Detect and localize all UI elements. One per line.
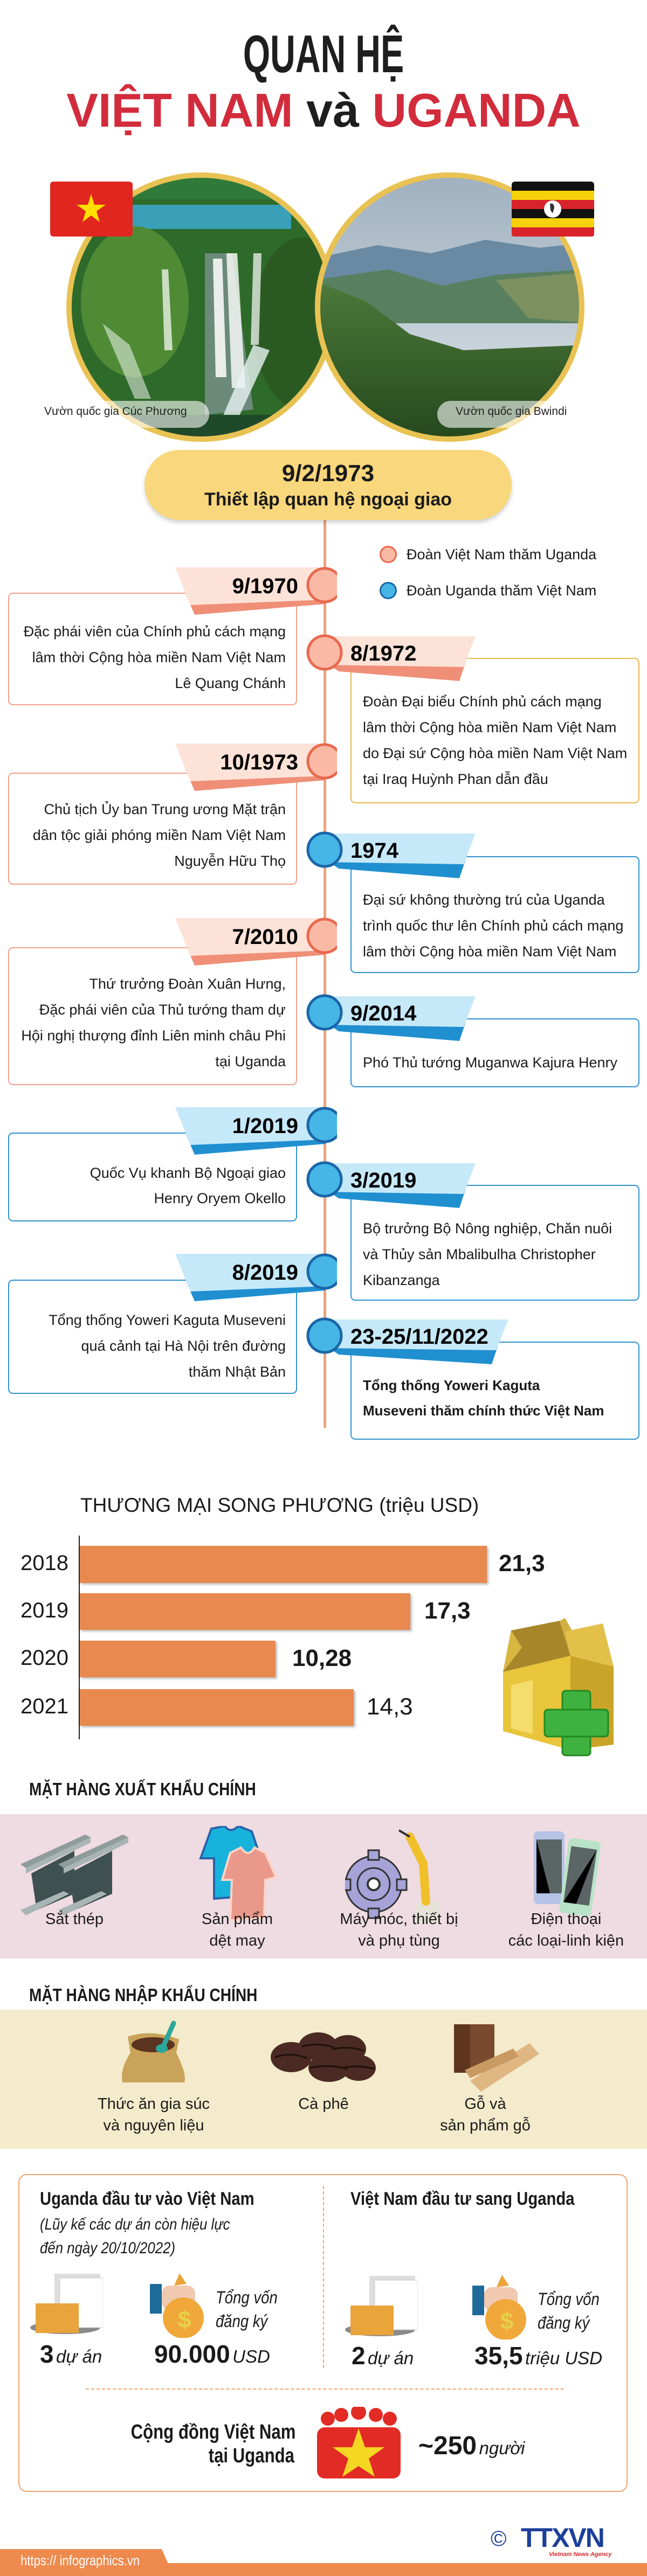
entry: 7/2010 [8,918,337,1085]
title line 1: QUAN HỆ [243,24,404,84]
icon: money bag: $ [500,2308,513,2335]
entry: 8/1972: Đoàn Đại biểu Chính phủ cách mạng [363,693,602,710]
block: Uganda invests in Vietnam: (Lũy kế các dự án còn hiệu lực [40,2216,230,2233]
icon: people with flag star [317,2407,401,2478]
establishment pill [144,450,512,520]
label: phones [508,1911,624,1949]
icon: shirts [199,1826,276,1921]
entry: 7/2010: 7/2010 [232,925,298,949]
legend [380,546,596,599]
footer bar [0,2549,647,2576]
panel: exports [0,1814,647,1959]
entry: 23-25/11/2022: 23-25/11/2022 [350,1325,488,1349]
block: Uganda invests in Vietnam [30,2189,278,2368]
entry: 23-25/11/2022: Tổng thống Yoweri Kaguta [363,1377,540,1393]
block: Vietnam invests in Uganda: Tổng vốn [538,2289,600,2309]
entry: 9/2014: Phó Thủ tướng Muganwa Kajura Henry [363,1054,617,1071]
logo: TTXVN: © [491,2527,506,2551]
legend: Đoàn Việt Nam thăm Uganda [407,546,596,563]
label: phones: Điện thoại [531,1911,601,1928]
entry: 10/1973: Nguyễn Hữu Thọ [174,853,286,869]
block: Vietnamese community: tại Uganda [209,2445,294,2467]
entry: 9/1970: Đặc phái viên của Chính phủ cách mạng [24,623,286,640]
entry: 3/2019: Bộ trưởng Bộ Nông nghiệp, Chăn nuôi [363,1220,612,1237]
block: Uganda invests in Vietnam: 3 dự án [40,2340,102,2368]
trade title: THƯƠNG MẠI SONG PHƯƠNG (triệu USD) [80,1494,479,1516]
entry: 3/2019 [306,1162,639,1301]
entry: 8/2019 [8,1253,337,1394]
block: Vietnam invests in Uganda: 35,5 triệu USD [474,2342,602,2370]
label: animal feed [98,2095,210,2134]
entry: 8/2019: thăm Nhật Bản [189,1364,286,1380]
label: wood [440,2095,531,2134]
label: machinery: Máy móc, thiết bị [340,1911,458,1928]
entry: 23-25/11/2022: Museveni thăm chính thức Việt Nam [363,1402,604,1419]
entry: 1974: Đại sứ không thường trú của Uganda [363,892,605,908]
entry: 9/1970: Lê Quang Chánh [175,675,286,691]
panel: imports [0,2010,647,2149]
entry: 7/2010: tại Uganda [215,1053,286,1070]
entry: 9/1970: 9/1970 [232,574,298,598]
caption pills [43,401,209,428]
block: Vietnamese community [131,2407,525,2478]
logo: TTXVN: TTXVN [521,2523,604,2553]
entry: 8/1972 [306,635,639,803]
icon: money bag [150,2273,204,2338]
establishment pill: 9/2/1973 [282,460,374,487]
flag: Uganda [512,182,594,237]
entry: 9/2014: 9/2014 [350,1002,417,1025]
bar 2020: 2020 [20,1646,68,1670]
block: Uganda invests in Vietnam: 90.000 USD [154,2340,270,2368]
label: machinery [340,1911,458,1949]
icon: steel beams [20,1835,128,1915]
entry: 9/2014 [306,995,639,1087]
label: animal feed: Thức ăn gia súc [98,2095,210,2113]
entry: 7/2010: Đặc phái viên của Thủ tướng tham dự [39,1002,286,1018]
bar 2018: 2018 [20,1551,68,1575]
block: Vietnam invests in Uganda: Việt Nam đầu tư sang Uganda [350,2189,574,2209]
label: textiles: Sản phẩm [202,1911,273,1928]
entry: 8/1972: lâm thời Cộng hòa miền Nam Việt Nam [363,719,616,735]
entry: 3/2019: 3/2019 [350,1169,416,1192]
legend: Uganda visits [380,582,397,599]
timeline line [324,517,326,1428]
icon: money bag: $ [178,2307,191,2333]
entry: 1974: trình quốc thư lên Chính phủ cách mạng [363,918,623,934]
title [66,24,581,137]
label: coffee: Cà phê [298,2095,349,2113]
title line 2: VIỆT NAM và UGANDA [66,84,581,137]
block: Vietnam invests in Uganda [345,2189,602,2370]
bar 2019 [20,1593,471,1633]
bar 2021 [20,1689,413,1728]
entry: 10/1973: dân tộc giải phóng miền Nam Việt Nam [33,827,286,843]
panel: investment and community [18,2174,628,2492]
photo: Cuc Phuong waterfall [72,178,322,436]
icon: documents [345,2276,418,2336]
heading: main exports: MẶT HÀNG XUẤT KHẨU CHÍNH [29,1779,256,1799]
bar 2020 [20,1641,352,1680]
entry: 8/2019: quá cảnh tại Hà Nội trên đường [81,1338,286,1354]
icon: box with plus [503,1618,614,1756]
photo: Bwindi forest [320,178,579,436]
bar 2018 [20,1546,545,1586]
entry: 8/1972: do Đại sứ Cộng hòa miền Nam Việt Nam [363,745,627,761]
block: Vietnam invests in Uganda: 2 dự án [352,2342,414,2370]
footer bar: https:// infographics.vn [20,2552,140,2568]
logo: TTXVN: Vietnam News Agency [549,2551,612,2558]
entry: 1/2019 [8,1107,337,1221]
flag: Vietnam [50,182,133,237]
photos with flags [50,172,594,442]
entry: 8/1972: 8/1972 [350,642,416,665]
entry: 8/1972: tại Iraq Huỳnh Phan dẫn đầu [363,771,548,787]
entry: 1974 [306,832,639,973]
label: textiles: dệt may [209,1932,265,1949]
entry: 10/1973: Chủ tịch Ủy ban Trung ương Mặt trận [44,801,286,817]
label: wood: Gỗ và [464,2095,506,2113]
bar 2019: 2019 [20,1599,68,1622]
entry: 23-25/11/2022 [306,1318,639,1440]
icon: feed sack [122,2020,185,2082]
label: machinery: và phụ tùng [358,1932,440,1949]
block: Vietnamese community: ~250 người [418,2432,525,2460]
icon: documents [30,2274,103,2334]
caption: Cuc Phuong: Vườn quốc gia Cúc Phương [44,405,187,418]
entry: 7/2010: Hội nghị thượng đỉnh Liên minh châu Phi [21,1027,286,1044]
entry: 8/2019: Tổng thống Yoweri Kaguta Museveni [49,1312,286,1328]
entry: 8/2019: 8/2019 [232,1261,298,1284]
block: Uganda invests in Vietnam: Uganda đầu tư vào Việt Nam [40,2189,254,2209]
entry: 1/2019: 1/2019 [232,1114,298,1138]
entry: 3/2019: Kibanzanga [363,1272,440,1288]
label: wood: sản phẩm gỗ [440,2117,531,2134]
legend: Đoàn Uganda thăm Việt Nam [407,582,596,599]
label: textiles [202,1911,273,1949]
icon: coffee beans [271,2032,376,2082]
block: Uganda invests in Vietnam: đến ngày 20/10/2022) [40,2239,175,2257]
bar 2020: 10,28 [292,1645,352,1671]
bar chart: bilateral trade [20,1536,545,1739]
block: Uganda invests in Vietnam: đăng ký [216,2311,267,2331]
icon: wood logs [454,2024,539,2092]
entry: 1/2019: Quốc Vụ khanh Bộ Ngoại giao [90,1165,286,1181]
block: Vietnam invests in Uganda: đăng ký [538,2313,589,2332]
entry: 7/2010: Thứ trưởng Đoàn Xuân Hưng, [89,976,286,992]
bar 2019: 17,3 [424,1598,471,1624]
entry: 3/2019: và Thủy sản Mbalibulha Christopher [363,1246,596,1262]
entry: 9/1970 [8,567,337,705]
icon: money bag [472,2275,526,2339]
label: steel: Sắt thép [45,1911,104,1928]
heading: main imports: MẶT HÀNG NHẬP KHẨU CHÍNH [29,1985,257,2005]
caption: Bwindi: Vườn quốc gia Bwindi [456,405,567,418]
entry: 1974: lâm thời Cộng hòa miền Nam Việt Nam [363,943,616,960]
label: phones: các loại-linh kiện [508,1932,624,1949]
icon: gear and robot arm [345,1829,439,1923]
block: Vietnamese community: Cộng đồng Việt Nam [131,2421,295,2443]
entry: 9/1970: lâm thời Cộng hòa miền Nam Việt Nam [32,649,286,665]
entry: 1/2019: Henry Oryem Okello [154,1190,286,1206]
entry: 1974: 1974 [350,839,399,863]
label: animal feed: và nguyên liệu [103,2117,204,2134]
legend: Vietnam visits [380,546,397,563]
establishment pill: Thiết lập quan hệ ngoại giao [204,489,452,510]
bar 2021: 2021 [20,1695,68,1718]
entry: 10/1973: 10/1973 [220,751,298,774]
icon: phones [534,1831,601,1916]
bar 2021: 14,3 [367,1693,413,1720]
logo: TTXVN [491,2523,612,2558]
text: 21,3 [499,1550,545,1577]
entry: 10/1973 [8,744,337,885]
block: Uganda invests in Vietnam: Tổng vốn [216,2288,278,2307]
